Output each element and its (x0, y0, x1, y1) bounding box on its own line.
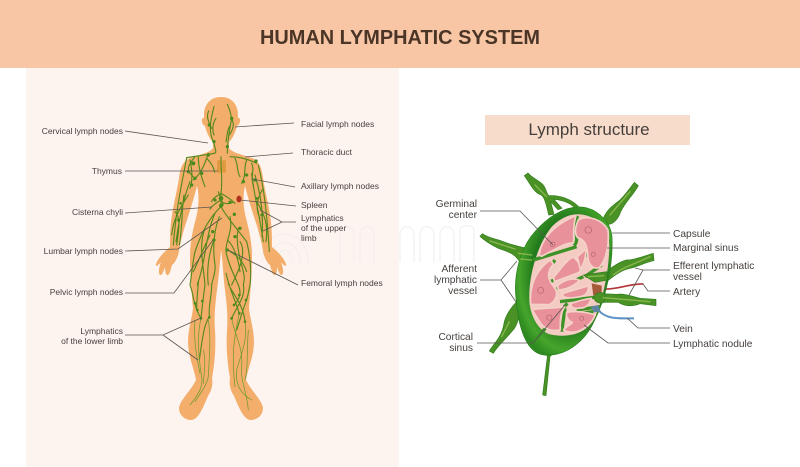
label: Lymphatic nodule: Lymphatic nodule (673, 339, 753, 350)
label: Vein: Vein (673, 324, 693, 335)
panel: body background (26, 68, 399, 467)
thymus (217, 160, 226, 173)
label: Cervical lymph nodes: Cervical lymph nodes (42, 126, 123, 136)
lymphatic nodules (530, 216, 608, 332)
trabeculae (533, 216, 602, 338)
title: HUMAN LYMPHATIC SYSTEM (260, 27, 540, 49)
label: Afferent lymphatic vessel: vessel (448, 286, 477, 297)
spleen (236, 196, 242, 202)
label: Lymphatics of the upper limb (260, 210, 347, 243)
label: Lymphatic nodule (584, 325, 753, 350)
label: Thymus (92, 166, 218, 176)
label: Cortical sinus: Cortical (438, 332, 473, 343)
subheading: Lymph structure (485, 115, 690, 145)
label: Lumbar lymph nodes: Lumbar lymph nodes (44, 246, 123, 256)
label: Marginal sinus: Marginal sinus (673, 243, 739, 254)
body silhouette (156, 97, 286, 420)
header band (0, 0, 800, 68)
label: Cisterna chyli: Cisterna chyli (72, 207, 123, 217)
lymph vessels: legs and feet (190, 273, 252, 410)
label: Pelvic lymph nodes: Pelvic lymph nodes (50, 287, 123, 297)
lymph node diagram (480, 173, 656, 396)
label: Axillary lymph nodes: Axillary lymph nodes (301, 181, 379, 191)
label: Efferent lymphatic vessel: vessel (673, 272, 702, 283)
label: Lymphatics of the upper limb: limb (301, 233, 317, 243)
human body figure (156, 97, 286, 420)
label: Artery (643, 284, 701, 298)
label: Cervical lymph nodes (42, 126, 208, 143)
germinal centers (538, 227, 595, 320)
label: Capsule: Capsule (673, 229, 711, 240)
label: Afferent lymphatic vessel: Afferent (442, 264, 477, 275)
label: Lymphatics of the lower limb (61, 318, 201, 360)
label: Germinal center: Germinal (436, 199, 477, 210)
inner sinus (529, 214, 609, 336)
label: Germinal center: center (449, 210, 478, 221)
afferent and efferent vessels (480, 173, 656, 396)
label: Artery: Artery (673, 287, 701, 298)
label: Marginal sinus (607, 243, 739, 254)
label: Capsule (612, 229, 711, 240)
label: Vein (627, 318, 693, 335)
label: Afferent lymphatic vessel: lymphatic (434, 275, 477, 286)
label: Spleen: Spleen (301, 200, 328, 210)
label: Germinal center (436, 199, 553, 245)
label: Cortical sinus: sinus (449, 343, 473, 354)
lymph vessels: upper body (172, 104, 269, 285)
label: Pelvic lymph nodes (50, 240, 213, 297)
label: Axillary lymph nodes (252, 179, 379, 191)
label: Afferent lymphatic vessel (434, 261, 517, 302)
label: Spleen (240, 200, 328, 210)
vein (598, 310, 634, 318)
label: Lymphatics of the lower limb: Lymphatics (80, 326, 123, 336)
label: Lymphatics of the upper limb: Lymphatics (301, 213, 344, 223)
label: Facial lymph nodes (235, 119, 374, 129)
hilum vessel roots (490, 185, 650, 337)
label: Cisterna chyli (72, 207, 212, 217)
label: Lymphatics of the lower limb: of the lower limb (61, 336, 123, 346)
label: Cortical sinus (438, 305, 565, 354)
label: Femoral lymph nodes (228, 250, 383, 288)
label: Facial lymph nodes: Facial lymph nodes (301, 119, 374, 129)
label: Femoral lymph nodes: Femoral lymph nodes (301, 278, 383, 288)
label: Lumbar lymph nodes (44, 218, 222, 256)
artery (603, 284, 643, 289)
subheading: Lymph structure: Lymph structure (528, 120, 650, 139)
label: Thoracic duct: Thoracic duct (301, 147, 353, 157)
label: Efferent lymphatic vessel: Efferent lymphatic (673, 261, 754, 272)
label: Efferent lymphatic vessel (629, 261, 754, 295)
label: Lymphatics of the upper limb: of the upper (301, 223, 347, 233)
capsule (515, 207, 612, 355)
label: Thymus: Thymus (92, 166, 122, 176)
label: Thoracic duct (245, 147, 353, 157)
